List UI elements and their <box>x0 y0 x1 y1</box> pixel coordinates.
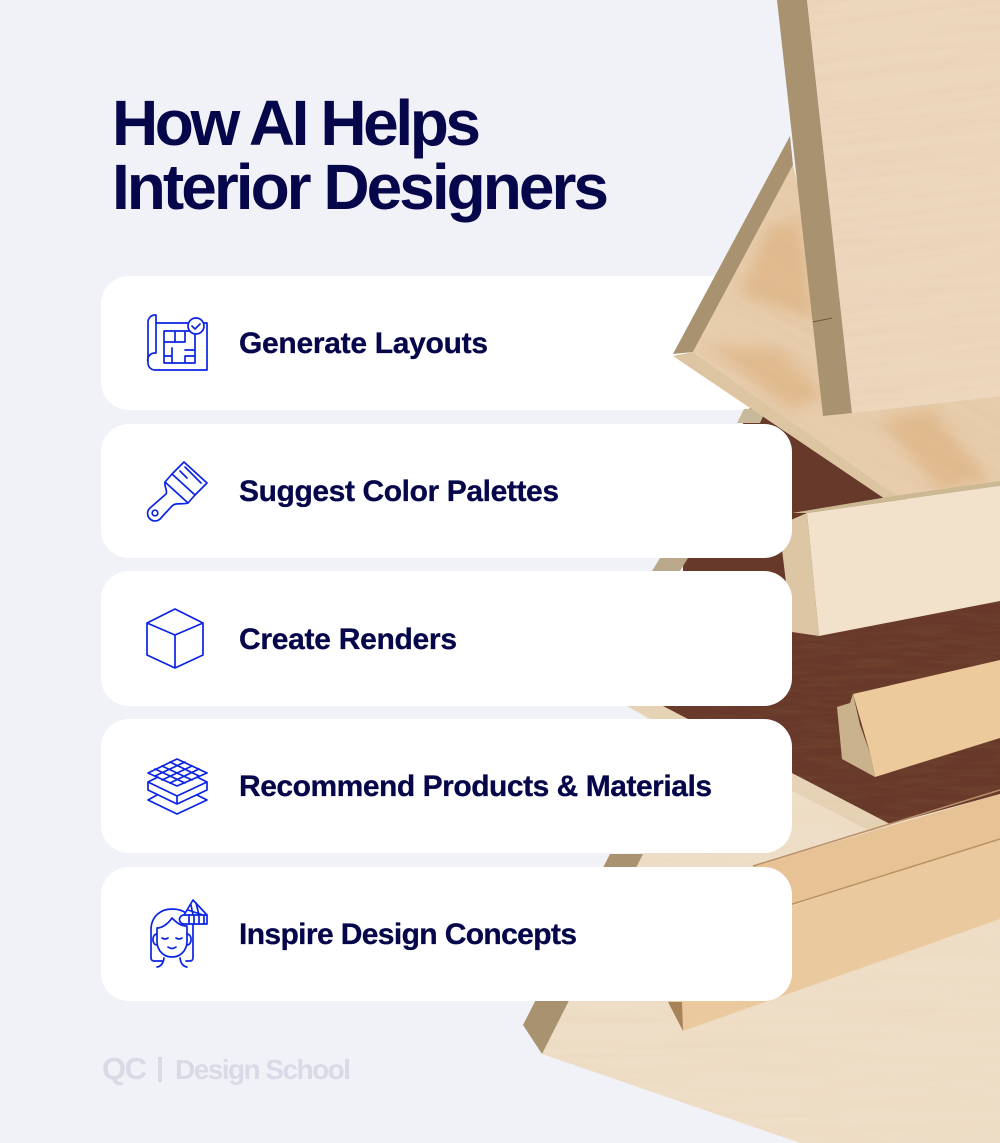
maple block <box>779 481 1000 636</box>
card: create renders <box>101 571 792 706</box>
title: Interior Designers <box>112 151 609 223</box>
icon: paint brush <box>148 462 207 521</box>
wood boards photo <box>500 0 1000 1143</box>
logo: QC Design School: Design School <box>175 1054 351 1085</box>
icon: woman with swatch fan <box>151 900 207 967</box>
icon: material layers <box>148 759 207 814</box>
card: inspire design concepts <box>101 867 792 1001</box>
item: generate layouts <box>148 315 488 370</box>
top oak board <box>777 0 1000 416</box>
logo: QC Design School <box>102 1051 351 1086</box>
logo: QC Design School: QC <box>102 1051 147 1086</box>
label: Create Renders <box>239 623 457 656</box>
title <box>112 87 609 223</box>
card: suggest color palettes <box>101 424 792 558</box>
label: Recommend Products & Materials <box>239 770 712 803</box>
oak board <box>673 136 1000 498</box>
label: Generate Layouts <box>239 327 488 360</box>
dark walnut boards <box>650 408 1000 840</box>
card: generate layouts background <box>101 276 792 410</box>
card: recommend products and materials <box>101 719 792 853</box>
bottom maple board <box>500 706 1000 1143</box>
title: How AI Helps <box>112 87 481 159</box>
maple moulding <box>837 660 1000 777</box>
label: Inspire Design Concepts <box>239 918 577 951</box>
icon: cube <box>147 609 203 668</box>
label: Suggest Color Palettes <box>239 475 559 508</box>
bamboo moulding <box>668 790 1000 1031</box>
icon: floor plan blueprint <box>148 315 207 370</box>
